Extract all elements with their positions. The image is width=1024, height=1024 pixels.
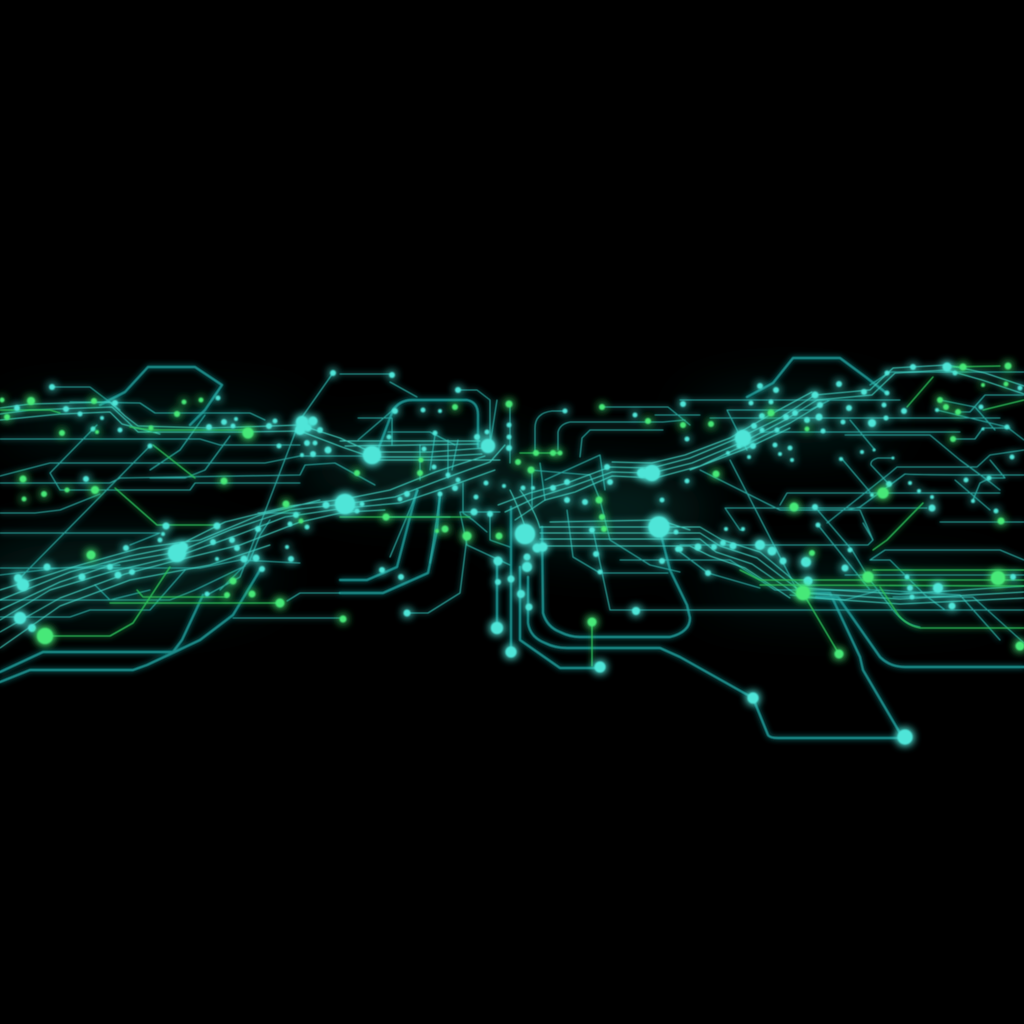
thin teal traces: [0, 372, 1024, 643]
bundled bright data streams: [0, 365, 1024, 648]
thick teal outer traces: [0, 358, 1024, 738]
green nodes: [0, 362, 1024, 658]
green signal traces: [0, 366, 1024, 666]
cyan nodes: [14, 362, 1022, 744]
ambient glow band: [0, 395, 1000, 610]
